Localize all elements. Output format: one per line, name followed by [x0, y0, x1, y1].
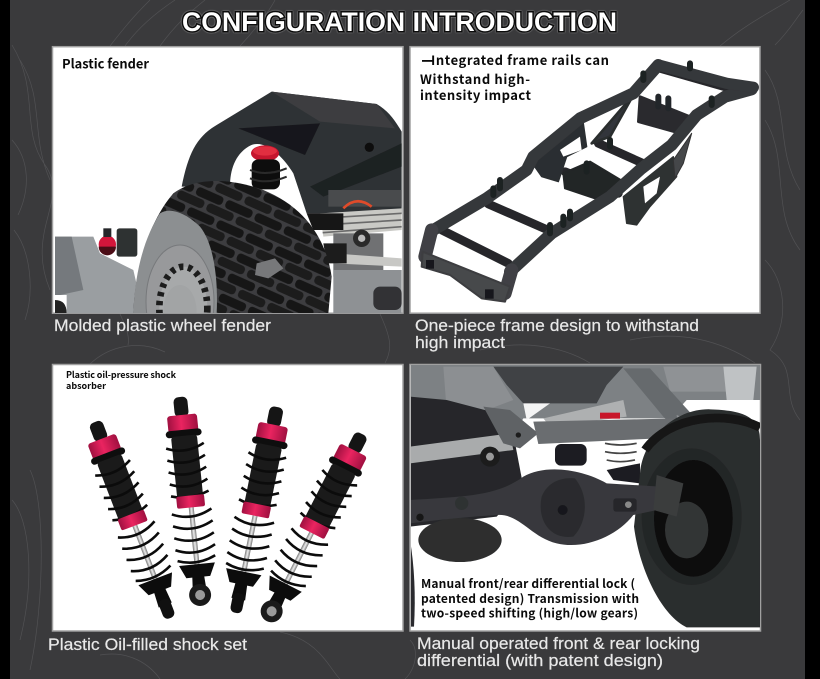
- panel: one-piece frame: [410, 47, 760, 313]
- panel: locking differential: [410, 364, 760, 631]
- label: plastic oil-pressure shock absorber: absorber: [66, 379, 106, 392]
- panel: plastic wheel fender: [52, 46, 404, 314]
- caption: manual locking differential: [417, 634, 700, 670]
- caption: one-piece frame design: One-piece frame design to withstand: [415, 316, 699, 335]
- caption: manual locking differential: Manual operated front & rear locking: [417, 634, 700, 653]
- label: plastic fender: Plastic fender: [62, 54, 149, 72]
- label: manual differential lock: Manual front/rear differential lock (: [421, 575, 635, 592]
- caption: one-piece frame design: [415, 316, 699, 352]
- label: integrated frame rails: intensity impact: [420, 85, 532, 104]
- label: integrated frame rails: [420, 50, 609, 104]
- shock 4: [260, 432, 366, 622]
- caption: manual locking differential: differential (with patent design): [417, 651, 663, 670]
- label: manual differential lock: patented design) Transmission with: [421, 590, 639, 607]
- caption: one-piece frame design: high impact: [415, 333, 505, 352]
- label: plastic oil-pressure shock absorber: Plastic oil-pressure shock: [66, 368, 177, 381]
- label: plastic oil-pressure shock absorber: [66, 368, 177, 392]
- title: CONFIGURATION INTRODUCTION: [182, 7, 617, 37]
- shock 3: [226, 406, 288, 614]
- label: integrated frame rails: Integrated frame rails can: [431, 50, 609, 69]
- photo: four shocks: [88, 396, 366, 622]
- caption: molded plastic wheel fender: Molded plastic wheel fender: [54, 316, 271, 335]
- photo: axle and wheel: [410, 365, 760, 627]
- photo: wheel and fender: [55, 92, 402, 313]
- shock 1: [88, 420, 174, 619]
- shock 2: [166, 396, 216, 606]
- label: manual differential lock: two-speed shifting (high/low gears): [421, 604, 638, 622]
- panel: oil-pressure shock absorbers: [52, 364, 403, 631]
- label: manual differential lock: [421, 575, 639, 622]
- caption: plastic oil-filled shock set: Plastic Oil-filled shock set: [48, 635, 247, 654]
- photo: ladder frame: [422, 63, 753, 302]
- label: integrated frame rails: Withstand high-: [420, 69, 530, 88]
